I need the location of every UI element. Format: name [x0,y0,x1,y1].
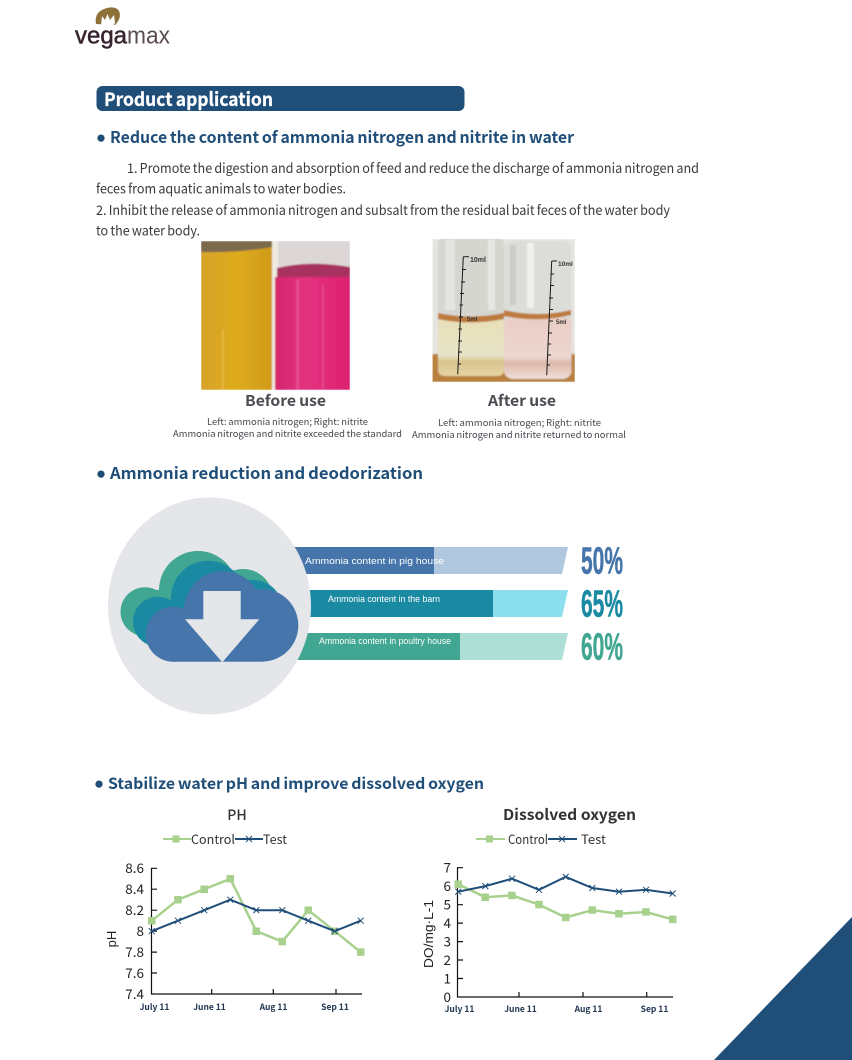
x axis labels: June 11 [504,1003,537,1015]
logo wordmark: max [127,22,170,50]
heading: reduce ammonia: Reduce the content of ammonia nitrogen and nitrite in water [110,124,574,148]
heading banner: Product application [96,86,464,112]
bar: barn 65%: Ammonia content in the barn [328,594,440,605]
photo: after use tubes: 5ml [556,320,567,326]
chart title: PH: PH [227,805,247,825]
caption: before use [173,390,402,440]
y axis labels: 8 [136,920,144,940]
y axis labels: 8.6 [125,857,144,877]
photo: after use tubes: 5ml [467,317,478,323]
heading: stabilize water pH: Stabilize water pH and improve dissolved oxygen [108,772,484,794]
bar chart: ammonia reduction [280,540,623,668]
caption: before use: Left: ammonia nitrogen; Right: nitrite [207,414,368,428]
y axis labels: 3 [444,930,451,950]
line chart: PH [104,805,364,1013]
x axis labels: June 11 [193,1001,226,1013]
x axis labels: Aug 11 [574,1003,602,1015]
caption: after use: Ammonia nitrogen and nitrite returned to normal [412,427,626,441]
series: control [148,875,364,956]
text block: benefits: 2. Inhibit the release of ammonia nitrogen and subsalt from the residual bait feces of the water body [96,200,670,219]
y axis labels [444,856,452,1006]
caption: before use: Ammonia nitrogen and nitrite exceeded the standard [173,426,402,440]
chart title: dissolved oxygen: Dissolved oxygen [503,804,636,825]
heading banner: Product application: Product application [104,86,273,112]
legend: control and test: Test [263,829,287,848]
y axis labels: 7.4 [125,983,144,1003]
corner triangle [714,917,852,1060]
y axis labels: 4 [444,912,452,932]
legend: control and test: Control [191,829,235,848]
x axis labels [445,1003,668,1015]
x axis labels: July 11 [445,1003,474,1015]
bar: poultry house 60% [280,626,623,668]
logo: vegamax [75,7,170,49]
photo: after use tubes: 10ml [470,257,486,264]
bar: pig house 50%: Ammonia content in pig house [305,556,444,567]
line chart: dissolved oxygen [421,804,676,1015]
y axis labels: 0 [444,986,451,1006]
series: test [455,874,676,896]
text block: benefits: 1. Promote the digestion and absorption of feed and reduce the discharge of ammonia nitrogen and [127,158,699,177]
y axis labels: 7.8 [125,941,144,961]
photo: after use tubes [432,236,575,382]
x axis labels: July 11 [140,1001,169,1013]
caption: after use [412,390,626,441]
axes [152,868,362,994]
y axis labels: 5 [444,894,451,914]
x axis labels [140,1001,349,1013]
y axis title: DO/mg·L-1 [421,900,436,968]
heading: stabilize water pH: ● [95,779,103,790]
caption: before use: Before use [245,390,326,411]
text block: benefits: feces from aquatic animals to water bodies. [96,178,346,198]
axes [458,868,673,997]
legend: control and test: Control [508,829,548,848]
series: test [149,897,364,934]
text block: benefits [96,158,699,240]
bar: barn 65% [280,584,623,626]
y axis labels: 7.6 [125,962,144,982]
x axis labels: Aug 11 [259,1001,287,1013]
legend: control and test [476,829,606,848]
bar: pig house 50%: 50% [581,540,623,582]
bar: poultry house 60%: Ammonia content in poultry house [319,636,451,647]
legend: control and test: Test [581,829,606,848]
x axis labels: Sep 11 [321,1001,349,1013]
logo wordmark [75,22,170,50]
heading: ammonia reduction: Ammonia reduction and deodorization [109,460,423,484]
icon: logo seed [96,7,120,26]
y axis labels: 7 [444,856,451,876]
heading: ammonia reduction: ● [97,469,105,480]
series: control [454,880,676,923]
text block: benefits: to the water body. [96,220,200,240]
bar: pig house 50% [280,540,623,582]
y axis labels: 1 [444,968,451,988]
bar: barn 65%: 65% [581,584,623,626]
y axis labels: 8.2 [125,899,144,919]
legend: control and test [163,829,287,848]
logo wordmark: vega [75,22,128,50]
caption: after use: After use [487,390,556,411]
y axis title: pH [104,931,119,947]
photo: before use tubes [201,241,350,390]
x axis labels: Sep 11 [641,1003,668,1015]
icon: cloud with down arrow [108,498,311,714]
y axis labels: 8.4 [125,878,144,898]
photo: after use tubes: 10ml [558,261,573,268]
heading: reduce ammonia: ● [97,133,105,144]
y axis labels [125,857,144,1003]
y axis labels: 6 [444,875,451,895]
y axis labels: 2 [444,949,451,969]
caption: after use: Left: ammonia nitrogen; Right: nitrite [438,415,601,429]
bar: poultry house 60%: 60% [581,626,623,668]
